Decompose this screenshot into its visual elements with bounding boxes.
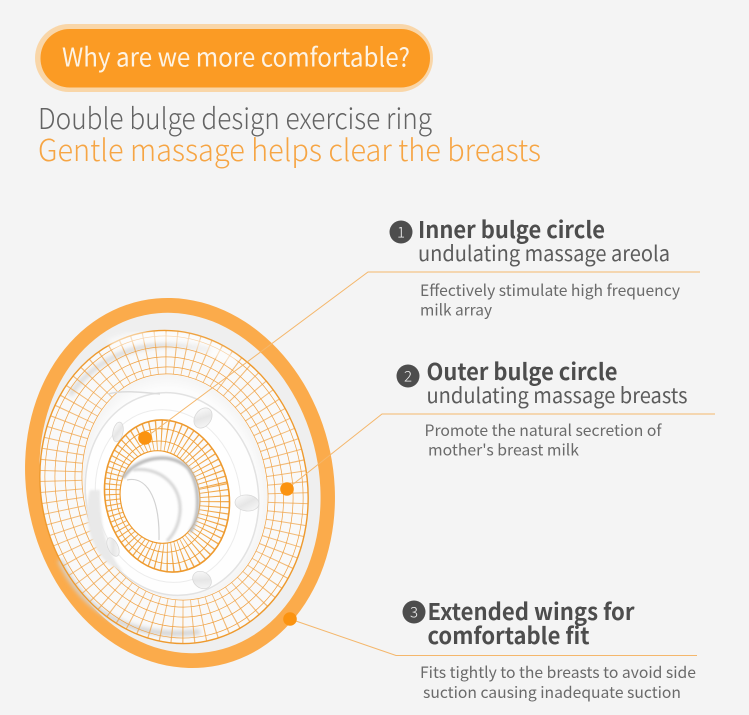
callout dots [138,431,297,626]
callout 2: outer bulge circle: mother's breast milk [428,438,579,460]
callout 2: outer bulge circle: Outer bulge circle [426,353,618,387]
number badge 3: 3 [410,602,418,622]
callout 1: inner bulge circle: undulating massage areola [418,238,670,268]
product diagram: breast shield disc [25,298,335,668]
outer bulge ring mesh [39,330,309,644]
callout 3: extended wings: comfortable fit [428,617,590,651]
subtitle: Double bulge design exercise ring [38,96,432,138]
callout leader lines [145,272,715,656]
subtitle: Gentle massage helps clear the breasts [38,126,541,170]
number badge 1: 1 [397,222,405,242]
massage bumps [104,404,260,592]
glare on mesh top [110,337,235,362]
callout 2: outer bulge circle: undulating massage breasts [426,380,688,410]
heading badge [35,24,433,92]
callout 3: extended wings: Fits tightly to the breasts to avoid side [420,661,696,683]
callout 3: extended wings [402,593,696,703]
callout 1: inner bulge circle: Effectively stimulate high frequency [420,279,680,301]
centre hole [112,444,208,550]
callout 3: extended wings: suction causing inadequate suction [423,681,681,703]
heading badge: Why are we more comfortable? [62,38,410,74]
inner bulge ring mesh [104,419,230,573]
callout 2: outer bulge circle: Promote the natural secretion of [424,419,662,441]
callout 3: extended wings: Extended wings for [428,593,635,627]
centre plate [62,358,288,616]
number badge 2: 2 [404,366,412,386]
number badge 2 [396,364,420,388]
outer orange wing [0,269,369,697]
callout 1: inner bulge circle: Inner bulge circle [418,211,605,245]
callout 1: inner bulge circle [390,211,680,320]
callout 2: outer bulge circle [396,353,688,460]
subtitle [38,96,541,170]
number badge 3 [402,600,426,624]
number badge 1 [390,220,412,244]
callout 1: inner bulge circle: milk array [420,298,492,320]
